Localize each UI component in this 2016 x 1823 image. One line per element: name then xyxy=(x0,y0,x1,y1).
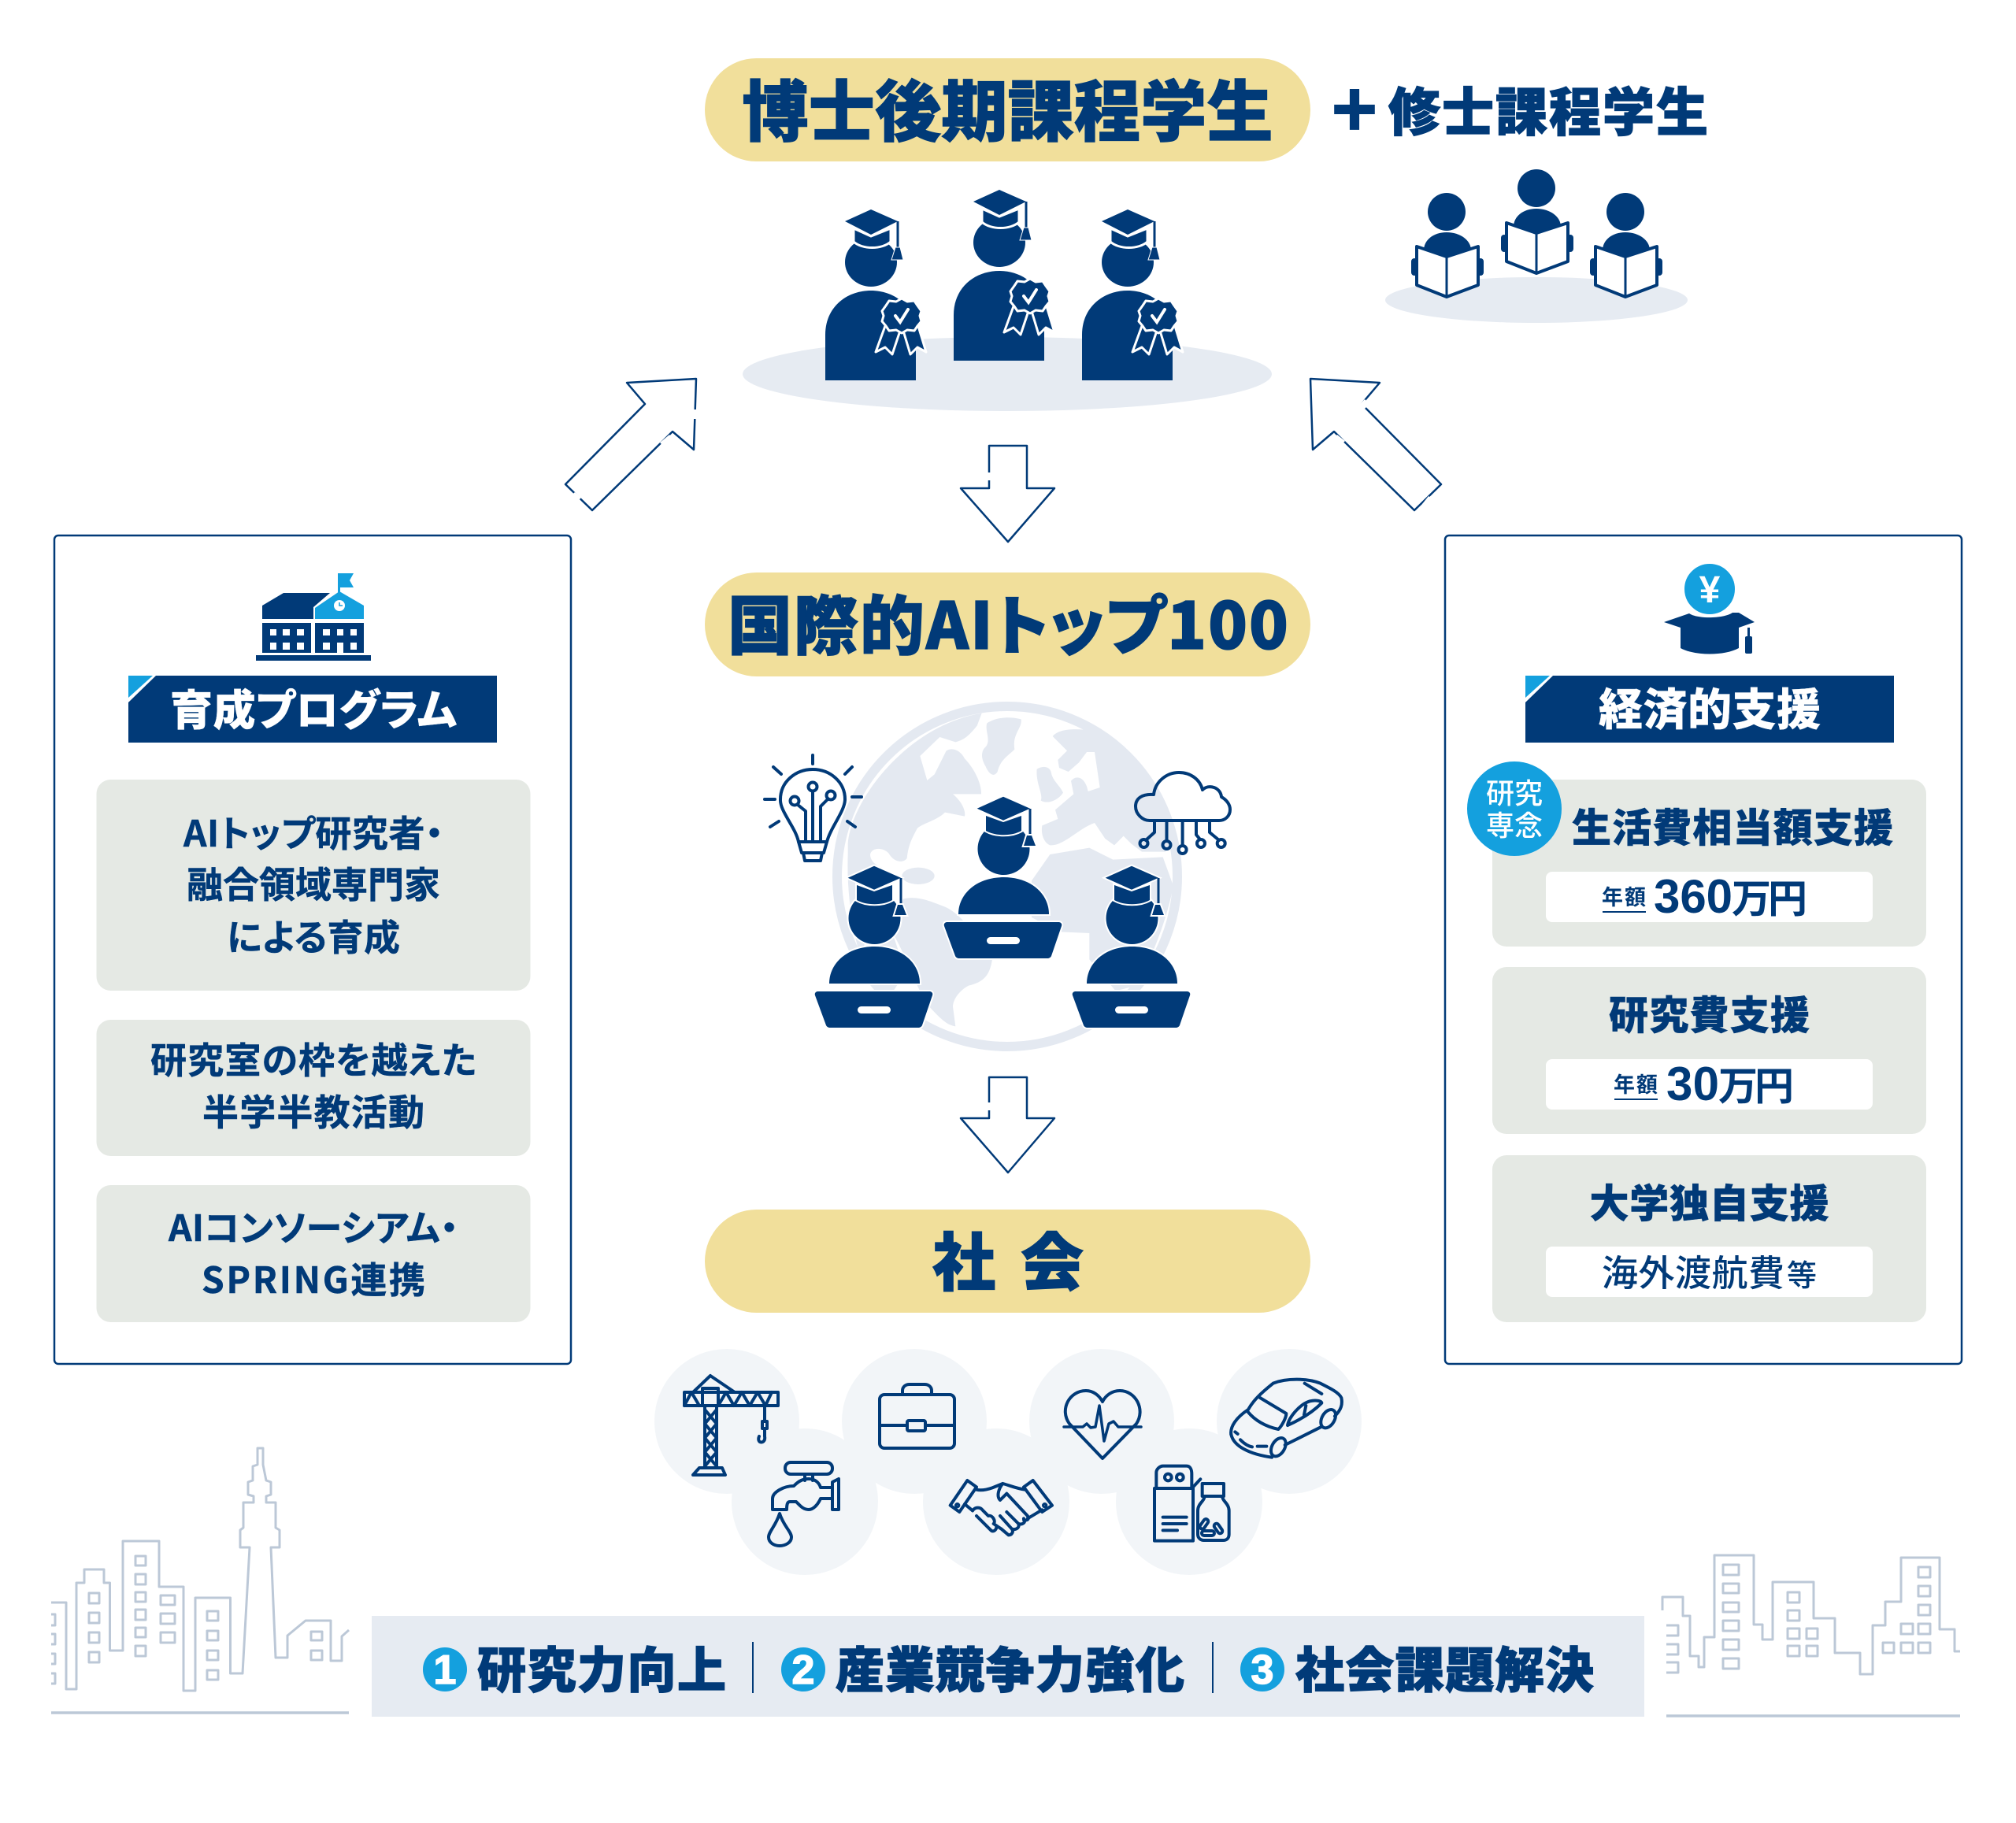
card: research funding: 30 xyxy=(1666,1058,1719,1110)
card: AI top researchers: 融合領域専門家 xyxy=(187,857,440,909)
card: cross-lab activities xyxy=(96,1020,531,1156)
card: living expenses support: 生活費相当額支援 xyxy=(1572,797,1893,854)
card: AI top researchers: による育成 xyxy=(227,910,400,962)
heading bar: financial support: 経済的支援 xyxy=(1599,675,1821,739)
card: research funding: 年額 xyxy=(1614,1068,1658,1099)
pill: society xyxy=(705,1210,1310,1313)
card: living expenses support: 年額 xyxy=(1602,880,1646,911)
card: AI consortium and SPRING: SPRING連携 xyxy=(202,1252,425,1304)
heading: plus master's students: ＋ xyxy=(1328,68,1381,146)
icon: construction crane xyxy=(684,1376,778,1475)
icon: students with laptops xyxy=(815,797,1190,1028)
goal 2: industrial competitiveness: 産業競争力強化 xyxy=(836,1631,1184,1702)
background circles: society icons xyxy=(654,1349,1362,1575)
card: university support: 大学独自支援 xyxy=(1589,1173,1829,1229)
pill: society: 社 会 xyxy=(932,1213,1084,1304)
icon: water faucet xyxy=(769,1462,839,1546)
card: living expenses support: 万円 xyxy=(1732,868,1807,924)
icon: cloud network xyxy=(1136,773,1230,854)
arrow: students to AI top 100 xyxy=(961,446,1054,542)
card: living expenses support: 360 xyxy=(1654,870,1732,923)
icon: light bulb with circuit xyxy=(765,755,862,861)
goal 3: social issues: 3 xyxy=(1251,1647,1273,1693)
goal 1: research capability: 1 xyxy=(434,1647,456,1693)
skyline: right city xyxy=(1662,1555,1960,1716)
band: three goals xyxy=(372,1616,1644,1717)
heading bar: financial support xyxy=(1525,675,1894,743)
heading: plus master's students: 修士課程学生 xyxy=(1388,71,1708,146)
card: research funding: 研究費支援 xyxy=(1609,984,1810,1041)
goal 1: research capability: 研究力向上 xyxy=(477,1631,726,1702)
icon: heart with pulse xyxy=(1064,1391,1141,1458)
graphic: globe xyxy=(837,706,1177,1047)
card: AI top researchers xyxy=(96,780,531,991)
icon: briefcase xyxy=(880,1384,954,1448)
icon: doctoral students with award ribbons xyxy=(743,190,1272,411)
card: university support: 海外渡航費 xyxy=(1602,1245,1784,1297)
card: university support xyxy=(1492,1155,1926,1322)
badge: research dedicated: 専念 xyxy=(1486,803,1543,844)
arrow: AI top 100 to society xyxy=(961,1077,1054,1173)
arrow: support to students xyxy=(1310,379,1441,510)
icon: yen coin on graduation cap xyxy=(1664,563,1755,654)
arrow: program to students xyxy=(565,379,699,510)
card: research funding xyxy=(1492,967,1926,1134)
heading bar: training program: 育成プログラム xyxy=(170,676,458,738)
icon: school building xyxy=(256,573,371,661)
skyline: left city with tower xyxy=(51,1448,349,1713)
card: AI top researchers: AIトップ研究者・ xyxy=(183,806,443,858)
icon: master's students reading xyxy=(1385,169,1688,323)
card: cross-lab activities: 研究室の枠を越えた xyxy=(150,1032,476,1084)
icon: medicine box and bottle xyxy=(1154,1466,1229,1541)
card: research funding: 万円 xyxy=(1718,1055,1794,1112)
pill: doctoral students heading: 博士後期課程学生 xyxy=(742,60,1273,155)
card: AI consortium and SPRING: AIコンソーシアム・ xyxy=(168,1200,458,1252)
card: living expenses support xyxy=(1492,780,1926,947)
icon: handshake xyxy=(951,1480,1052,1535)
panel: financial support xyxy=(1445,535,1962,1364)
icon: car xyxy=(1231,1380,1342,1459)
badge: research dedicated xyxy=(1467,761,1562,856)
card: AI consortium and SPRING xyxy=(96,1185,531,1322)
goal 2: industrial competitiveness: 2 xyxy=(792,1647,814,1693)
pill: international AI top 100: 国際的AIトップ100 xyxy=(728,574,1288,668)
card: university support: 等 xyxy=(1787,1251,1817,1295)
icon: yen coin on graduation cap: ¥ xyxy=(1699,569,1721,611)
card: cross-lab activities: 半学半教活動 xyxy=(202,1084,424,1136)
badge: research dedicated: 研究 xyxy=(1486,771,1543,812)
panel: training program xyxy=(54,535,571,1364)
goal 3: social issues: 社会課題解決 xyxy=(1295,1631,1594,1702)
